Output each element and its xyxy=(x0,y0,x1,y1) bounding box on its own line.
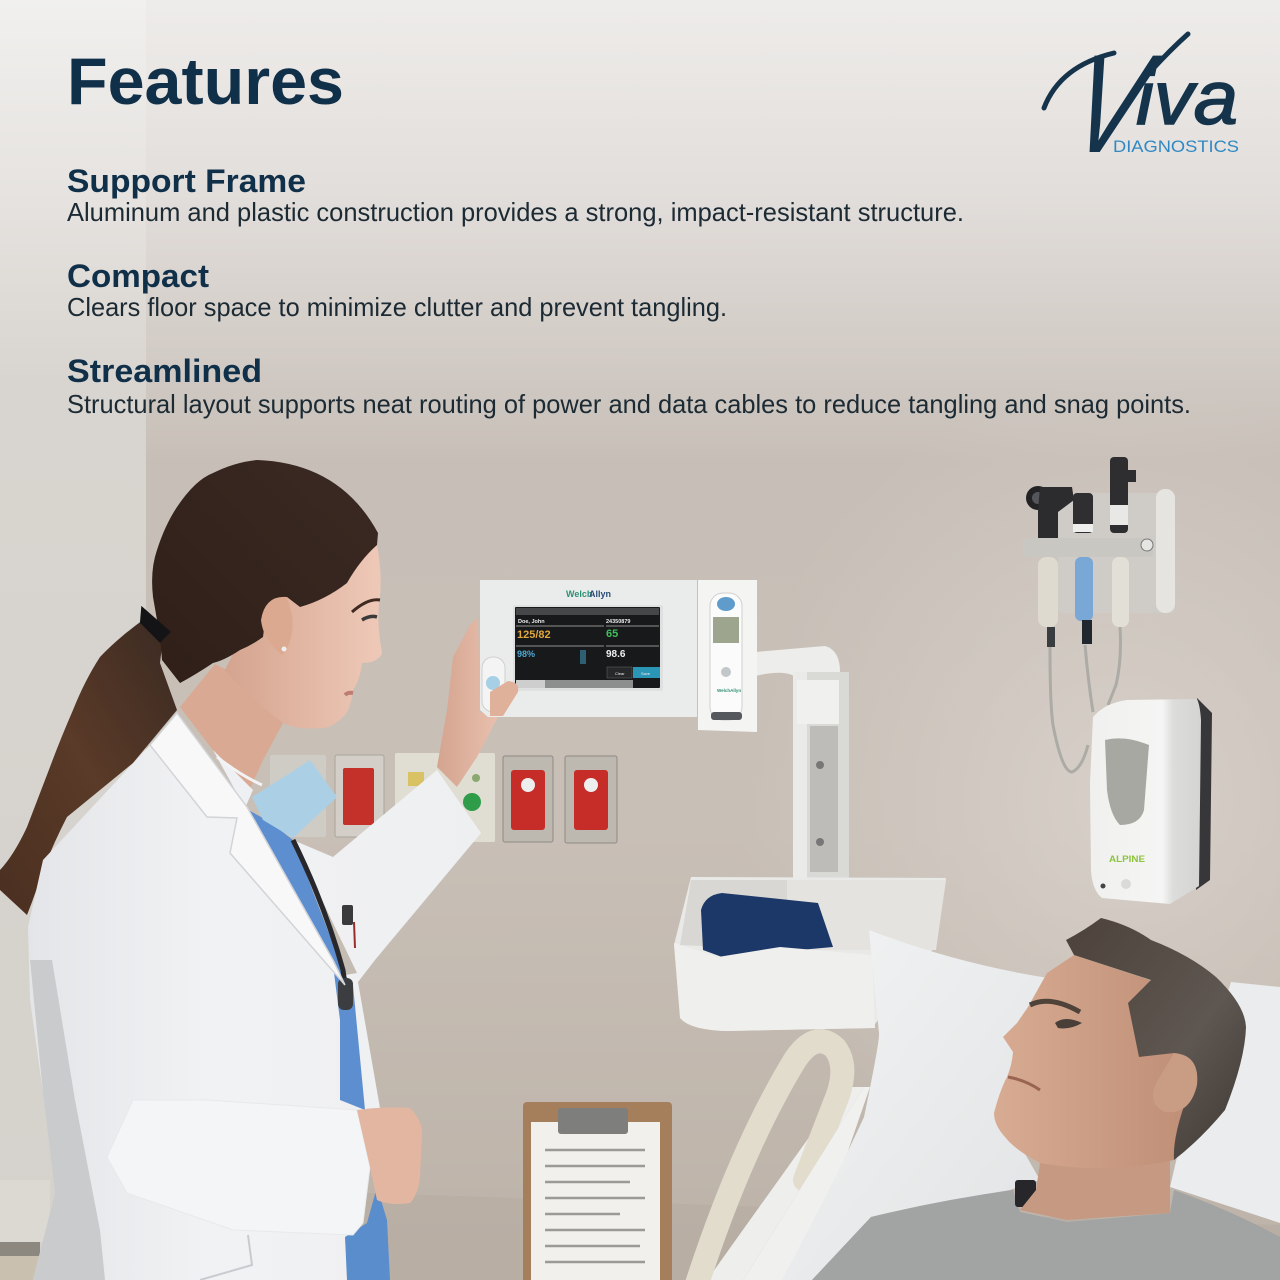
monitor screen: Doe, John xyxy=(518,619,545,625)
scrubs xyxy=(243,807,365,1110)
icon: otoscope xyxy=(1026,486,1074,647)
face xyxy=(225,545,382,728)
hair xyxy=(1066,918,1246,1160)
surgical mask xyxy=(252,760,337,838)
feature: Streamlined xyxy=(67,353,1191,419)
vital signs monitor: Allyn xyxy=(589,589,611,599)
feature: Compact xyxy=(67,258,727,322)
title: Features xyxy=(67,44,344,118)
basket front xyxy=(674,943,875,1031)
head xyxy=(994,955,1195,1168)
doctor xyxy=(0,460,518,1280)
soap dispenser xyxy=(1090,698,1212,904)
ear xyxy=(261,597,293,655)
patient in bed xyxy=(782,918,1280,1280)
icon: thermometer handle xyxy=(1110,457,1136,627)
monitor screen: 65 xyxy=(606,628,618,640)
icon: blood pressure cuff xyxy=(701,893,833,957)
monitor screen: Save xyxy=(641,671,651,676)
storage basket with blood pressure cuff xyxy=(674,877,946,1031)
coat side shading xyxy=(30,960,105,1280)
ear xyxy=(1153,1053,1197,1112)
wall-mounted otoscope set xyxy=(1023,457,1175,772)
vital signs monitor: Welch xyxy=(566,589,592,599)
feature: Streamlined: Streamlined xyxy=(67,353,262,389)
monitor screen: 98% xyxy=(517,649,535,659)
feature: Support Frame: Aluminum and plastic construction provides a strong, impact-resistant structure. xyxy=(67,197,964,227)
lower hand xyxy=(357,1107,422,1204)
forearm sleeve xyxy=(107,1100,370,1235)
thermometer xyxy=(710,593,742,720)
vital signs monitor: WelchAllyn xyxy=(717,688,741,693)
coat pocket xyxy=(200,1235,252,1280)
ponytail xyxy=(0,620,177,915)
monitor screen: 125/82 xyxy=(517,629,551,641)
shirt xyxy=(812,1190,1280,1280)
white undershirt and strap xyxy=(213,750,253,808)
wall mount arm xyxy=(755,646,849,878)
stethoscope xyxy=(293,840,355,1010)
power button xyxy=(482,657,505,712)
coat xyxy=(28,712,481,1280)
monitor screen: 98.6 xyxy=(606,649,626,660)
monitor screen: Clear xyxy=(615,671,625,676)
back pillow xyxy=(1170,982,1280,1223)
eye and brow xyxy=(345,600,380,695)
feature: Compact: Compact xyxy=(67,258,209,294)
monitor screen xyxy=(513,605,663,691)
logo: Viva Diagnostics: DIAGNOSTICS xyxy=(1113,137,1239,156)
scrubs lower xyxy=(345,1187,390,1280)
feature: Support Frame xyxy=(67,163,964,227)
vital signs monitor xyxy=(480,580,757,732)
black collar item xyxy=(1015,1180,1036,1207)
monitor screen: 24350879 xyxy=(606,619,630,625)
neck xyxy=(180,664,285,795)
logo: Viva Diagnostics xyxy=(1044,26,1239,183)
thumb xyxy=(490,681,518,716)
feature: Compact: Clears floor space to minimize clutter and prevent tangling. xyxy=(67,292,727,322)
raised hand xyxy=(437,617,518,787)
feature: Support Frame: Support Frame xyxy=(67,163,306,199)
bed rail xyxy=(695,1041,870,1280)
icon: ophthalmoscope xyxy=(1073,493,1093,644)
soap dispenser: ALPINE xyxy=(1109,854,1145,864)
face details xyxy=(1008,1001,1082,1090)
feature: Streamlined: Structural layout supports neat routing of power and data cables to reduce tangling and snag points. xyxy=(67,389,1191,419)
clipboard xyxy=(523,1102,672,1280)
lab coat lapel xyxy=(150,713,345,985)
hair tie xyxy=(142,610,168,640)
front pillow xyxy=(782,930,1055,1280)
panel: wall outlets xyxy=(270,753,617,843)
neck xyxy=(1020,1130,1170,1220)
logo: Viva Diagnostics: iva xyxy=(1136,56,1238,141)
hair xyxy=(152,460,378,683)
logo: Viva Diagnostics: V xyxy=(1058,26,1170,183)
